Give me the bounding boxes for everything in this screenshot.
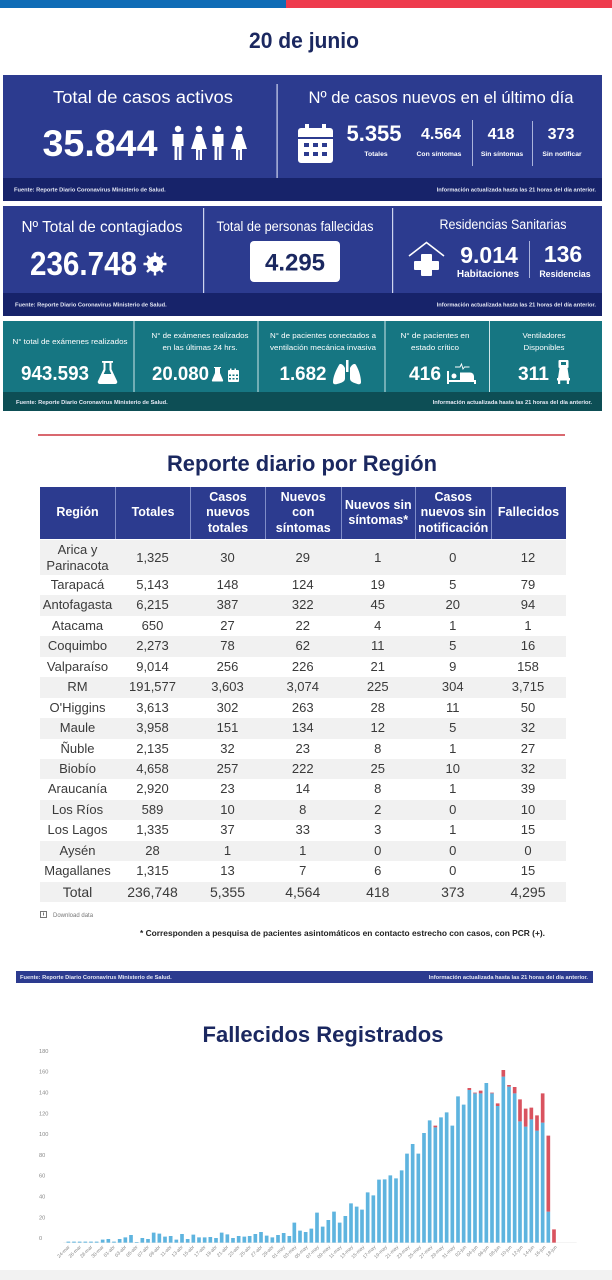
table: daily report by region: 1 bbox=[374, 550, 381, 565]
x axis labels: 13-abr bbox=[171, 1244, 185, 1259]
x axis labels: 25-abr bbox=[239, 1244, 253, 1259]
x axis labels: 14-jun bbox=[522, 1244, 536, 1258]
x axis labels: 19-abr bbox=[205, 1244, 219, 1259]
table: daily report by region: O'Higgins bbox=[50, 700, 105, 715]
stat: tests last 24 hours: en las últimas 24 hrs. bbox=[162, 343, 238, 352]
table: daily report by region: 27 bbox=[521, 740, 535, 756]
table: daily report by region: 8 bbox=[299, 802, 306, 817]
y axis labels: 120 bbox=[39, 1112, 48, 1118]
table: daily report by region: 14 bbox=[296, 781, 310, 796]
stat: rooms: 9.014 bbox=[460, 242, 518, 268]
heading: daily report by region: Reporte diario por Región bbox=[167, 451, 437, 476]
table: daily report by region: 322 bbox=[292, 597, 314, 612]
stat: total new bbox=[346, 121, 402, 158]
table header: con bbox=[292, 505, 314, 519]
footnote: * Corresponden a pesquisa de pacientes asintomáticos en contacto estrecho con casos, con PCR (+). bbox=[140, 929, 545, 938]
x axis labels: 01-may bbox=[271, 1244, 287, 1260]
table: daily report by region: 4,658 bbox=[136, 761, 169, 776]
table header: síntomas bbox=[276, 521, 331, 535]
table: daily report by region: 5,355 bbox=[210, 884, 245, 900]
table: daily report by region: Coquimbo bbox=[48, 638, 107, 653]
table: daily report by region: Aysén bbox=[60, 843, 95, 858]
stat: not notified: 373 bbox=[548, 126, 574, 143]
table: daily report by region: 257 bbox=[217, 761, 238, 776]
table: daily report by region: Arica y Parinacota bbox=[46, 542, 109, 572]
table: daily report by region: 1 bbox=[299, 843, 306, 858]
table: daily report by region: 650 bbox=[142, 618, 163, 633]
table: daily report by region: 23 bbox=[296, 740, 310, 756]
stat: rooms bbox=[457, 242, 520, 280]
callout: total deaths bbox=[250, 241, 340, 282]
table: daily report by region: 4 bbox=[374, 618, 381, 633]
table: daily report by region bbox=[40, 487, 566, 902]
table: daily report by region: 236,748 bbox=[127, 884, 178, 900]
heading: registered deaths: Fallecidos Registrados bbox=[202, 1022, 444, 1047]
table header: Nuevos sin bbox=[345, 498, 412, 512]
x axis labels: 06-jun bbox=[477, 1244, 491, 1258]
table: daily report by region: 373 bbox=[441, 884, 464, 900]
table header: Región bbox=[56, 505, 99, 519]
table: daily report by region: 5,143 bbox=[136, 577, 169, 592]
table: daily report by region: Valparaíso bbox=[47, 659, 108, 674]
stat: residences bbox=[539, 241, 591, 279]
stat: total tests: N° total de exámenes realizados bbox=[12, 337, 128, 346]
table: daily report by region: 191,577 bbox=[129, 679, 176, 694]
stat: total tests: 943.593 bbox=[21, 363, 89, 385]
stat: ventilators: 311 bbox=[518, 364, 549, 385]
table: daily report by region: 30 bbox=[220, 550, 235, 565]
table: daily report by region: 151 bbox=[217, 720, 238, 735]
icon: hospital bed bbox=[447, 364, 476, 384]
x axis labels: 12-jun bbox=[511, 1244, 525, 1258]
icon: flask and calendar bbox=[212, 367, 239, 382]
table: daily report by region: Atacama bbox=[52, 618, 103, 633]
table header: Nuevos bbox=[281, 490, 326, 504]
stat: ventilated patients: 1.682 bbox=[280, 364, 326, 385]
table: daily report by region: 23 bbox=[220, 781, 235, 796]
table: daily report by region: 0 bbox=[449, 550, 456, 565]
title: date: 20 de junio bbox=[249, 28, 359, 53]
table: daily report by region: 13 bbox=[220, 863, 235, 878]
x axis labels: 29-abr bbox=[261, 1244, 276, 1259]
table: daily report by region: 387 bbox=[217, 597, 238, 612]
table header: Casos bbox=[209, 490, 247, 504]
table: daily report by region: 10 bbox=[220, 802, 235, 817]
table: daily report by region: 28 bbox=[371, 700, 385, 715]
table: daily report by region: 256 bbox=[217, 659, 238, 674]
table: daily report by region: 62 bbox=[296, 638, 310, 653]
stat: critical patients bbox=[400, 331, 476, 385]
stat: ventilated patients: ventilación mecánica invasiva bbox=[270, 343, 376, 352]
panel: tests and ICU bbox=[3, 321, 602, 411]
x axis labels: 18-jun bbox=[545, 1244, 559, 1258]
table: daily report by region: 0 bbox=[449, 863, 456, 878]
table header: totales bbox=[208, 521, 248, 535]
stat: residences: Residencias bbox=[539, 269, 591, 279]
x axis labels: 24-mar bbox=[56, 1244, 72, 1260]
x axis labels: 21-may bbox=[384, 1244, 400, 1260]
x axis labels: 15-may bbox=[350, 1244, 366, 1260]
stat: without symptoms: 418 bbox=[488, 126, 514, 143]
table: daily report by region: 1 bbox=[524, 618, 532, 633]
table: daily report by region: 0 bbox=[524, 843, 532, 858]
x axis labels: 27-may bbox=[418, 1244, 434, 1260]
table: daily report by region: 29 bbox=[296, 550, 310, 565]
table: daily report by region: Los Ríos bbox=[52, 802, 103, 817]
x axis labels: 13-may bbox=[339, 1244, 355, 1260]
panel: active and new cases bbox=[3, 75, 602, 201]
table: daily report by region: 9,014 bbox=[136, 659, 169, 674]
y axis labels: 140 bbox=[39, 1091, 48, 1097]
table: daily report by region: 302 bbox=[217, 700, 238, 715]
table: daily report by region: 1 bbox=[449, 781, 456, 796]
x axis labels: 04-jun bbox=[466, 1244, 480, 1258]
y axis labels: 160 bbox=[39, 1070, 48, 1076]
table: daily report by region: 2,920 bbox=[136, 781, 169, 796]
table: daily report by region: RM bbox=[67, 679, 88, 694]
table: daily report by region: 1 bbox=[449, 618, 456, 633]
stat: ventilators: Ventiladores bbox=[522, 331, 566, 340]
table: daily report by region: 5 bbox=[449, 638, 456, 653]
table: daily report by region: 3,613 bbox=[136, 700, 169, 715]
icon: calendar bbox=[298, 124, 333, 163]
table: daily report by region: 78 bbox=[220, 638, 235, 653]
table: daily report by region: 2,135 bbox=[136, 740, 169, 756]
stat: with symptoms bbox=[417, 126, 462, 158]
table: daily report by region: 15 bbox=[521, 822, 535, 837]
x axis labels: 17-abr bbox=[193, 1244, 208, 1259]
table: daily report by region: 33 bbox=[296, 822, 310, 837]
stat: ventilators: Disponibles bbox=[524, 343, 565, 352]
table: daily report by region: 1 bbox=[224, 843, 231, 858]
table: daily report by region: 134 bbox=[292, 720, 314, 735]
table header: Totales bbox=[132, 505, 174, 519]
table: daily report by region: 39 bbox=[521, 781, 535, 796]
table: daily report by region: 4,564 bbox=[285, 884, 320, 900]
table: daily report by region: 222 bbox=[292, 761, 314, 776]
heading: residences: Residencias Sanitarias bbox=[440, 217, 567, 232]
table: daily report by region: 226 bbox=[292, 659, 314, 674]
y axis labels: 0 bbox=[39, 1236, 42, 1242]
source note: Fuente: Reporte Diario Coronavirus Ministerio de Salud. bbox=[16, 400, 168, 406]
number: total infected: 236.748 bbox=[30, 245, 137, 282]
x axis labels: 27-abr bbox=[250, 1244, 264, 1259]
table: daily report by region: 263 bbox=[292, 700, 314, 715]
heading: total deaths: Total de personas fallecidas bbox=[216, 219, 374, 234]
icon: ventilator bbox=[557, 360, 570, 384]
source note bbox=[15, 302, 596, 308]
table: daily report by region: Total bbox=[63, 884, 92, 900]
icon: lungs bbox=[333, 360, 361, 384]
source note bbox=[16, 400, 592, 406]
stat: not notified bbox=[542, 126, 582, 158]
top flag bar bbox=[0, 0, 612, 8]
table: daily report by region: 124 bbox=[292, 577, 314, 592]
x axis labels: 17-may bbox=[362, 1244, 378, 1260]
x axis labels: 25-may bbox=[407, 1244, 423, 1260]
x axis labels: 11-may bbox=[328, 1244, 344, 1260]
download data link: Download data bbox=[53, 913, 94, 919]
table header: notificación bbox=[418, 521, 488, 535]
x axis labels: 05-may bbox=[294, 1244, 310, 1260]
x axis labels: 29-may bbox=[430, 1244, 446, 1260]
source note: Información actualizada hasta las 21 horas del día anterior. bbox=[437, 302, 596, 308]
heading: total infected: Nº Total de contagiados bbox=[22, 219, 182, 236]
x axis labels: 09-may bbox=[316, 1244, 332, 1260]
table header: nuevos bbox=[206, 505, 250, 519]
y axis labels: 100 bbox=[39, 1132, 48, 1138]
x axis labels: 03-may bbox=[282, 1244, 298, 1260]
icon: house with cross bbox=[409, 242, 444, 276]
stat: with symptoms: Con síntomas bbox=[417, 151, 462, 158]
stat: residences: 136 bbox=[544, 241, 582, 267]
number: active cases: 35.844 bbox=[42, 123, 158, 164]
stat: total new: 5.355 bbox=[346, 121, 402, 146]
stat: not notified: Sin notificar bbox=[542, 151, 582, 158]
table: daily report by region: 1,315 bbox=[136, 863, 169, 878]
stat: total tests bbox=[12, 337, 128, 385]
callout: total deaths: 4.295 bbox=[265, 250, 325, 276]
table: daily report by region: 37 bbox=[220, 822, 235, 837]
x axis labels: 30-mar bbox=[90, 1244, 106, 1260]
x axis labels: 03-abr bbox=[114, 1244, 128, 1259]
table: daily report by region: 0 bbox=[449, 802, 456, 817]
x axis labels: 09-abr bbox=[148, 1244, 162, 1259]
stat: rooms: Habitaciones bbox=[457, 269, 520, 280]
table: daily report by region: Maule bbox=[60, 720, 95, 735]
table: daily report by region: 32 bbox=[220, 740, 235, 756]
stat: without symptoms: Sin síntomas bbox=[481, 151, 523, 158]
y axis labels: 20 bbox=[39, 1215, 45, 1221]
y axis labels: 180 bbox=[39, 1049, 48, 1055]
x axis labels: 07-may bbox=[305, 1244, 321, 1260]
x axis labels: 05-abr bbox=[125, 1244, 140, 1259]
x axis labels: 15-abr bbox=[182, 1244, 196, 1259]
table: daily report by region: 32 bbox=[521, 761, 535, 776]
table: daily report by region: 11 bbox=[371, 638, 384, 653]
icon: flask bbox=[98, 361, 117, 384]
table: daily report by region: 3,603 bbox=[211, 679, 244, 694]
source bar: Fuente: Reporte Diario Coronavirus Ministerio de Salud. bbox=[20, 975, 172, 981]
table: daily report by region: 22 bbox=[296, 618, 310, 633]
table: daily report by region: 19 bbox=[371, 577, 385, 592]
download data link bbox=[40, 912, 94, 919]
source note bbox=[14, 188, 596, 194]
table: daily report by region: 3,958 bbox=[136, 720, 169, 735]
x axis labels: 02-jun bbox=[454, 1244, 468, 1258]
icon: people bbox=[172, 126, 247, 160]
table: daily report by region: Antofagasta bbox=[43, 597, 112, 612]
x axis labels: 11-abr bbox=[160, 1244, 174, 1258]
x axis labels: 08-jun bbox=[488, 1244, 502, 1258]
table: daily report by region: 3,715 bbox=[512, 679, 544, 694]
x axis labels: 31-may bbox=[441, 1244, 457, 1260]
heading: new cases: Nº de casos nuevos en el último día bbox=[308, 89, 574, 107]
stat: without symptoms bbox=[481, 126, 523, 158]
table: daily report by region: 8 bbox=[374, 740, 381, 756]
x axis labels: 10-jun bbox=[500, 1244, 514, 1258]
source note: Fuente: Reporte Diario Coronavirus Ministerio de Salud. bbox=[14, 188, 166, 194]
table: daily report by region: 50 bbox=[521, 700, 535, 715]
table: daily report by region: Biobío bbox=[59, 761, 96, 776]
heading: active cases: Total de casos activos bbox=[53, 87, 233, 107]
table: daily report by region: 5 bbox=[449, 720, 456, 735]
stat: total new: Totales bbox=[364, 151, 388, 158]
table header: Fallecidos bbox=[498, 505, 559, 519]
y axis labels: 60 bbox=[39, 1174, 45, 1180]
y axis labels bbox=[39, 1049, 48, 1242]
table: daily report by region: Araucanía bbox=[48, 781, 107, 796]
stat: critical patients: estado crítico bbox=[411, 343, 459, 352]
table: daily report by region: 94 bbox=[521, 597, 535, 612]
table: daily report by region: 304 bbox=[442, 679, 464, 694]
table: daily report by region: 0 bbox=[449, 843, 456, 858]
table: daily report by region: Los Lagos bbox=[48, 822, 108, 837]
table: daily report by region: 6 bbox=[374, 863, 381, 878]
source note: Fuente: Reporte Diario Coronavirus Ministerio de Salud. bbox=[15, 302, 167, 308]
table header: Casos bbox=[434, 490, 472, 504]
x axis labels: 16-jun bbox=[534, 1244, 548, 1258]
source bar bbox=[16, 971, 593, 983]
table: daily report by region: 79 bbox=[521, 577, 535, 592]
table: daily report by region: 2 bbox=[374, 802, 381, 817]
y axis labels: 80 bbox=[39, 1153, 45, 1159]
table: daily report by region: 12 bbox=[371, 720, 385, 735]
x axis labels: 01-abr bbox=[103, 1244, 117, 1259]
table header: síntomas* bbox=[348, 513, 408, 527]
bar chart: registered deaths bbox=[39, 1049, 577, 1260]
table: daily report by region: 1,325 bbox=[136, 550, 169, 565]
table: daily report by region: 10 bbox=[521, 802, 535, 817]
x axis labels bbox=[56, 1244, 559, 1260]
table: daily report by region: 20 bbox=[446, 597, 460, 612]
table: daily report by region: 0 bbox=[374, 843, 381, 858]
table: daily report by region: 6,215 bbox=[136, 597, 169, 612]
table: daily report by region: 27 bbox=[220, 618, 235, 633]
red bars: pending bbox=[435, 1070, 554, 1243]
icon: virus bbox=[144, 252, 166, 276]
table: daily report by region: 32 bbox=[521, 720, 535, 735]
table: daily report by region: 418 bbox=[366, 884, 389, 900]
x axis labels: 21-abr bbox=[216, 1244, 230, 1259]
table: daily report by region: 15 bbox=[521, 863, 535, 878]
stat: critical patients: 416 bbox=[409, 364, 441, 385]
table: daily report by region: 8 bbox=[374, 781, 381, 796]
table: daily report by region: Magallanes bbox=[44, 863, 111, 878]
stat: tests last 24 hours: N° de exámenes realizados bbox=[152, 331, 249, 340]
table: daily report by region: 148 bbox=[217, 577, 238, 592]
table: daily report by region: Ñuble bbox=[61, 740, 94, 756]
x axis labels: 26-mar bbox=[68, 1244, 83, 1260]
stat: with symptoms: 4.564 bbox=[421, 126, 461, 143]
table: daily report by region: 3,074 bbox=[286, 679, 319, 694]
source bar: Información actualizada hasta las 21 horas del día anterior. bbox=[429, 975, 588, 981]
table: daily report by region: 4,295 bbox=[510, 884, 546, 900]
stat: ventilated patients: N° de pacientes conectados a bbox=[270, 331, 376, 340]
table: daily report by region: 158 bbox=[517, 659, 539, 674]
table: daily report by region: 11 bbox=[446, 700, 460, 715]
table: daily report by region: Tarapacá bbox=[51, 577, 104, 592]
table: daily report by region: 10 bbox=[446, 761, 460, 776]
panel: totals, deaths and residences bbox=[3, 206, 602, 316]
table: daily report by region: 225 bbox=[367, 679, 389, 694]
table: daily report by region: 1 bbox=[449, 740, 456, 756]
table: daily report by region: 589 bbox=[142, 802, 163, 817]
table: daily report by region: 25 bbox=[371, 761, 385, 776]
x axis labels: 07-abr bbox=[137, 1244, 151, 1259]
table: daily report by region: 21 bbox=[371, 659, 385, 674]
table: daily report by region: 2,273 bbox=[136, 638, 169, 653]
y axis labels: 40 bbox=[39, 1195, 45, 1201]
stat: tests last 24 hours bbox=[152, 331, 249, 385]
x axis labels: 28-mar bbox=[79, 1244, 94, 1260]
stat: ventilators bbox=[518, 331, 570, 385]
table: daily report by region: 3 bbox=[374, 822, 381, 837]
source note: Información actualizada hasta las 21 horas del día anterior. bbox=[437, 188, 596, 194]
table header: nuevos sin bbox=[421, 505, 486, 519]
blue bars: confirmed bbox=[68, 1077, 548, 1243]
table: daily report by region: 45 bbox=[371, 597, 385, 612]
table: daily report by region: 9 bbox=[449, 659, 456, 674]
table: daily report by region: 5 bbox=[449, 577, 456, 592]
stat: critical patients: N° de pacientes en bbox=[400, 331, 470, 340]
table: daily report by region: 7 bbox=[299, 863, 306, 878]
table: daily report by region: 1 bbox=[449, 822, 456, 837]
table: daily report by region: 28 bbox=[145, 843, 160, 858]
table: daily report by region: 1,335 bbox=[136, 822, 169, 837]
x axis labels: 23-may bbox=[396, 1244, 412, 1260]
table: daily report by region: 12 bbox=[521, 550, 535, 565]
table header bbox=[40, 487, 566, 539]
stat: tests last 24 hours: 20.080 bbox=[152, 364, 209, 385]
table: daily report by region: 16 bbox=[521, 638, 535, 653]
x axis labels: 23-abr bbox=[227, 1244, 242, 1259]
stat: ventilated patients bbox=[270, 331, 376, 385]
source note: Información actualizada hasta las 21 horas del día anterior. bbox=[433, 400, 592, 406]
x axis labels: 19-may bbox=[373, 1244, 389, 1260]
